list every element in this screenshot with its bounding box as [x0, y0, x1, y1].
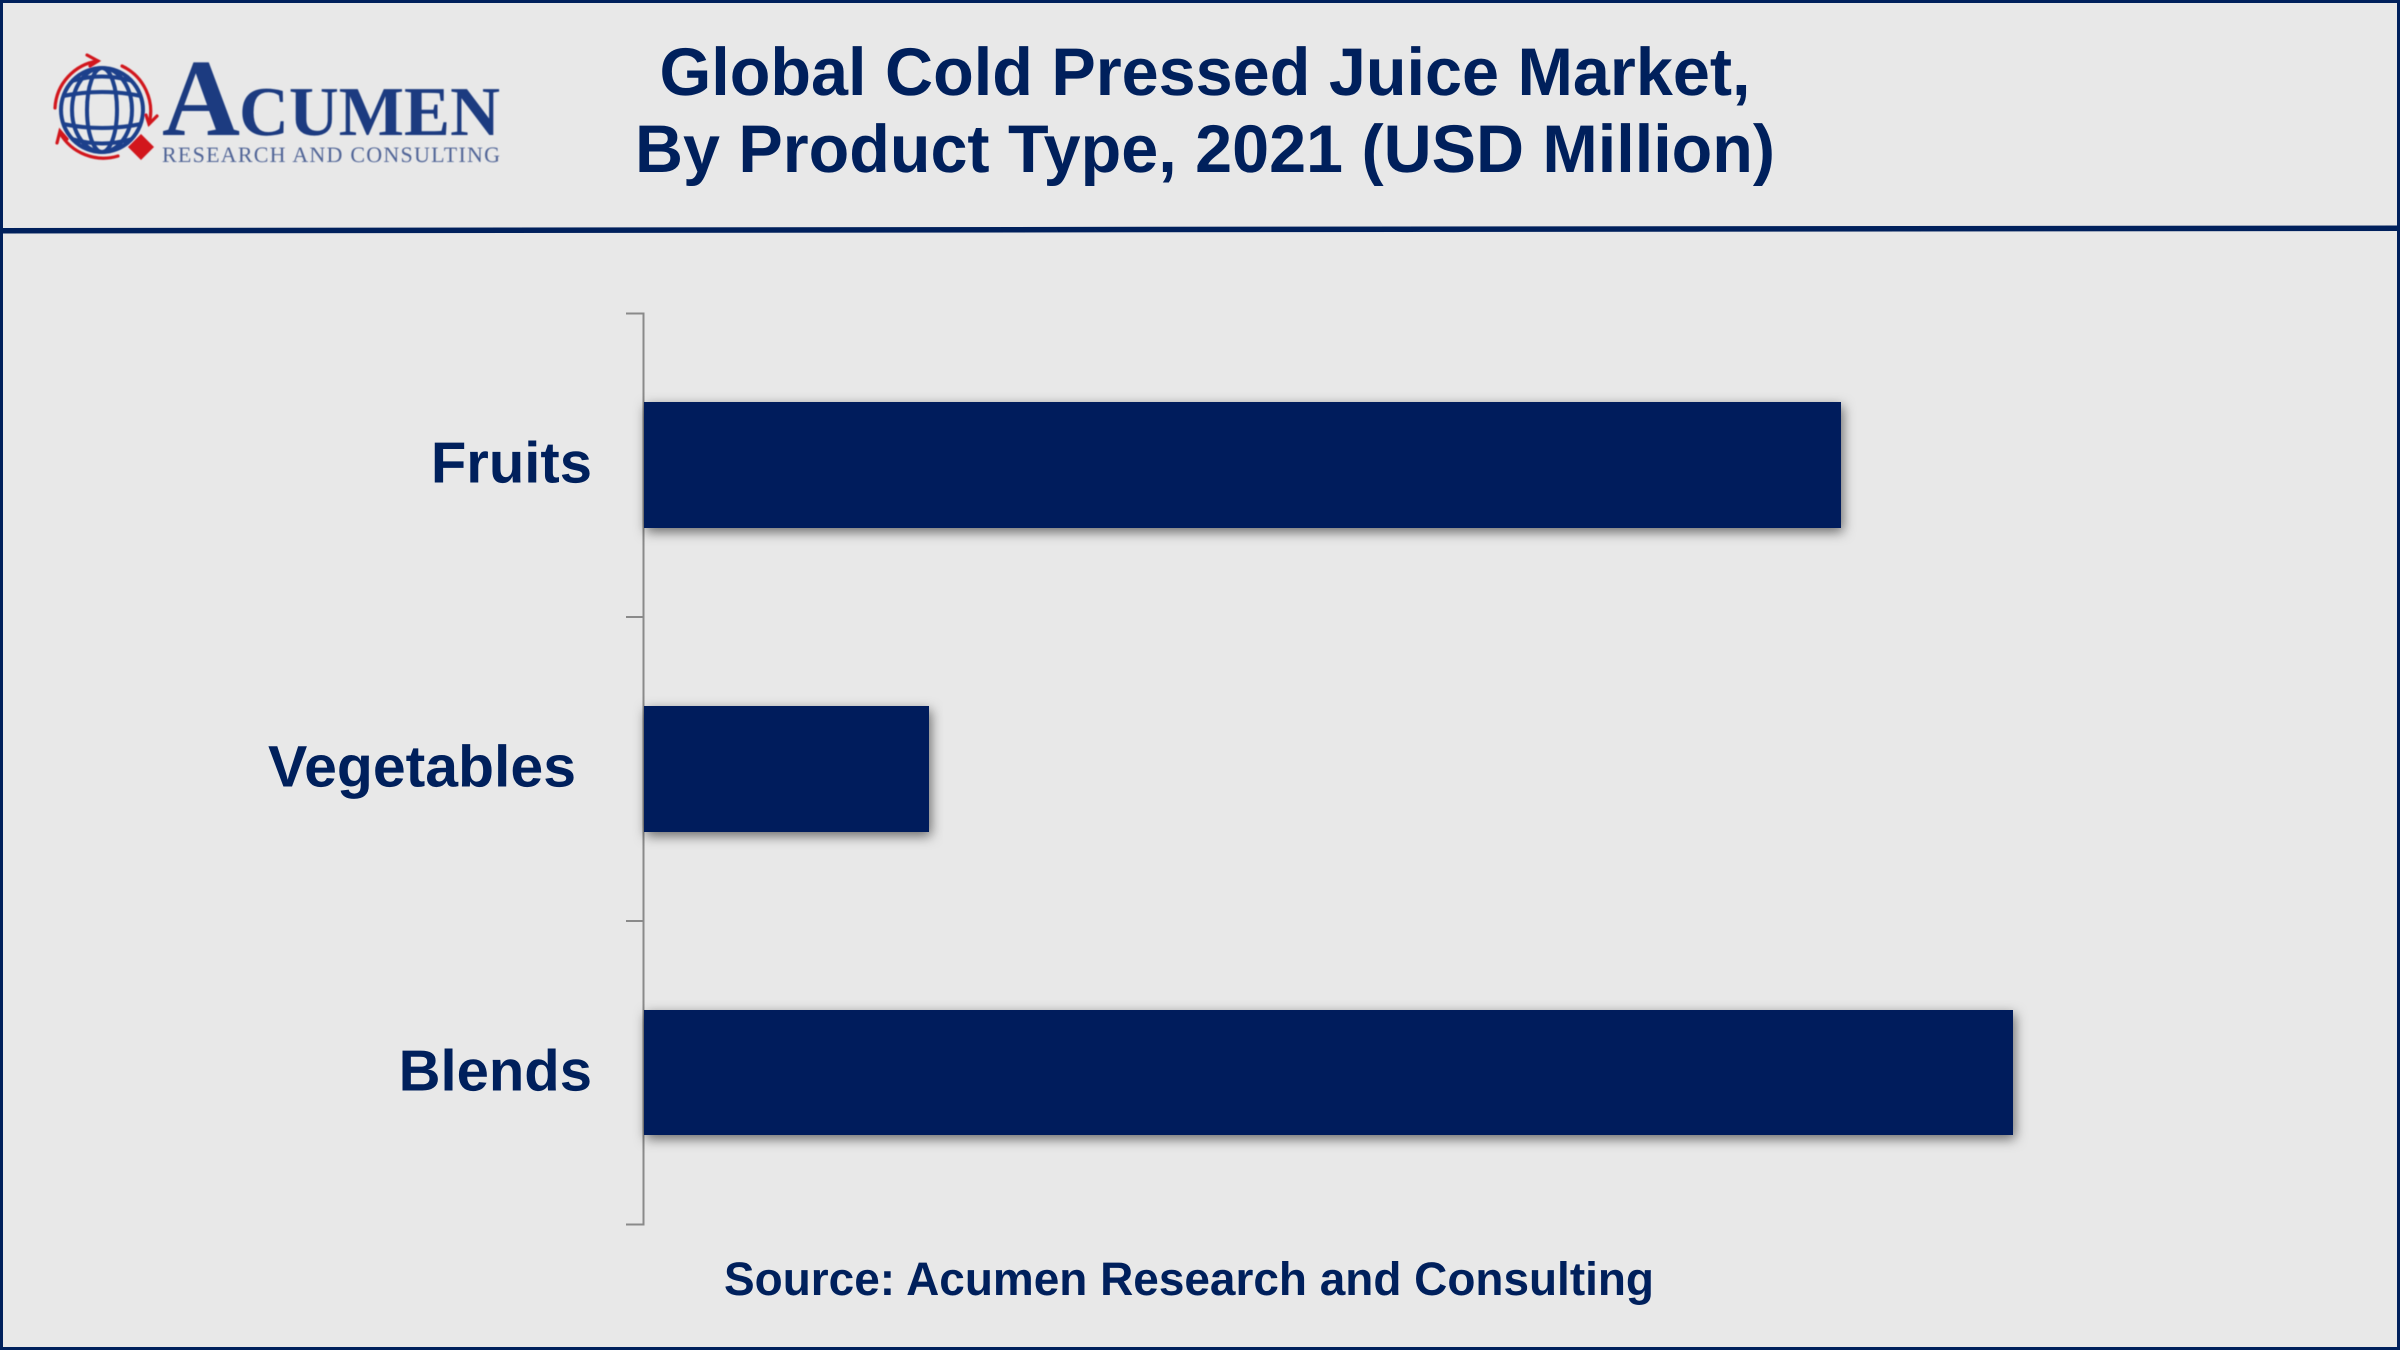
y axis with ticks — [626, 314, 644, 1224]
label: Blends: Blends — [399, 1038, 592, 1104]
bar chart — [268, 314, 2013, 1224]
header divider rule — [0, 226, 2400, 234]
bar: Blends — [644, 1010, 2013, 1135]
wordmark: Acumen — [162, 37, 500, 159]
icon: globe — [61, 68, 143, 152]
label: Vegetables: Vegetables — [268, 734, 576, 800]
bar: Vegetables — [644, 706, 929, 832]
label: Fruits: Fruits — [431, 430, 592, 496]
wordmark: research and consulting: RESEARCH AND CONSULTING — [162, 142, 500, 167]
logo: Acumen Research and Consulting — [55, 37, 500, 167]
title — [635, 35, 1775, 187]
source note: Source: Acumen Research and Consulting — [724, 1252, 1654, 1305]
title: Global Cold Pressed Juice Market, — [660, 35, 1750, 110]
wordmark: Acumen: CUMEN — [239, 74, 500, 151]
icon: red diamond — [128, 134, 154, 160]
bar: Fruits — [644, 402, 1841, 528]
wordmark: Acumen: A — [162, 37, 240, 159]
title: By Product Type, 2021 (USD Million) — [635, 112, 1775, 187]
icon: red circular arrows — [55, 55, 157, 158]
